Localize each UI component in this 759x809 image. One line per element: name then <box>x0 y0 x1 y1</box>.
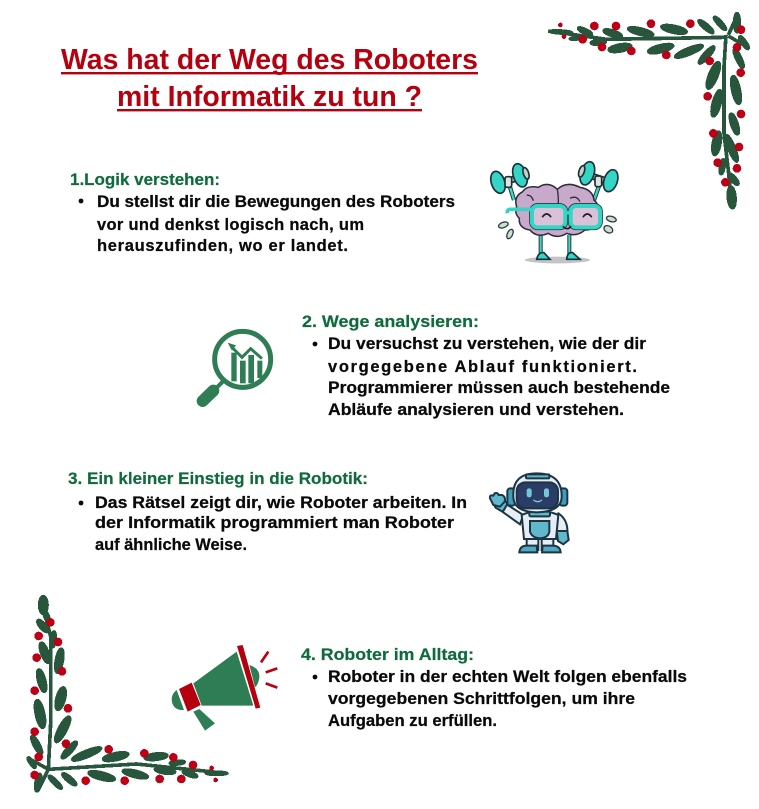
section 4: Roboter im Alltag: 4. Roboter im Alltag: <box>301 645 474 664</box>
section 3: Einstieg in die Robotik: Das Rätsel zeigt dir, wie Roboter arbeiten. In <box>95 494 467 512</box>
section 4: Roboter im Alltag <box>301 645 687 730</box>
section 3: Einstieg in die Robotik: auf ähnliche Weise. <box>95 536 247 554</box>
icon: megaphone <box>172 645 277 731</box>
section 2: Wege analysieren: Programmierer müssen auch bestehende <box>328 379 670 397</box>
section 2: Wege analysieren: vorgegebene Ablauf funktioniert. <box>328 358 637 376</box>
title: Was hat der Weg des Roboters <box>61 44 478 76</box>
section 2: Wege analysieren <box>302 312 670 419</box>
section 1: Logik verstehen: Du stellst dir die Bewegungen des Roboters <box>97 193 455 211</box>
section 3: Einstieg in die Robotik: 3. Ein kleiner Einstieg in die Robotik: <box>68 469 368 488</box>
title <box>61 44 478 113</box>
icon: waving robot <box>490 473 569 552</box>
section 4: Roboter im Alltag: Roboter in der echten Welt folgen ebenfalls <box>328 668 687 686</box>
section 1: Logik verstehen: herauszufinden, wo er landet. <box>97 237 348 255</box>
section 4: Roboter im Alltag: vorgegebenen Schrittfolgen, um ihre <box>328 690 635 708</box>
section 3: Einstieg in die Robotik <box>68 469 467 554</box>
section 1: Logik verstehen: vor und denkst logisch nach, um <box>97 216 364 234</box>
section 2: Wege analysieren: Du versuchst zu verstehen, wie der dir <box>328 335 647 353</box>
section 2: Wege analysieren: Abläufe analysieren und verstehen. <box>328 401 624 419</box>
section 3: Einstieg in die Robotik: der Informatik programmiert man Roboter <box>95 514 455 532</box>
section 1: Logik verstehen <box>70 170 455 255</box>
section 2: Wege analysieren: 2. Wege analysieren: <box>302 312 479 331</box>
section 1: Logik verstehen: 1.Logik verstehen: <box>70 170 220 189</box>
holly garland: bottom left corner <box>27 596 227 792</box>
icon: brain lifting dumbbells <box>488 160 621 263</box>
icon: magnifying glass with chart <box>203 331 271 401</box>
title: mit Informatik zu tun ? <box>117 81 422 113</box>
holly garland: top right corner <box>548 13 750 208</box>
section 4: Roboter im Alltag: Aufgaben zu erfüllen. <box>328 712 497 730</box>
